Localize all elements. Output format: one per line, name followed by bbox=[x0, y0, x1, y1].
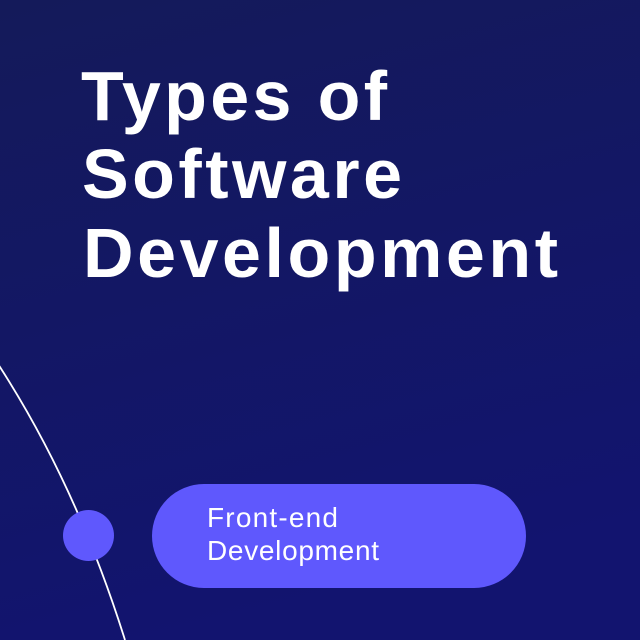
pill label: Front-end bbox=[207, 502, 338, 533]
title: Development bbox=[83, 214, 558, 292]
pill: Front-end Development bbox=[152, 484, 526, 588]
curved timeline line bbox=[0, 364, 125, 640]
title: Software bbox=[82, 135, 402, 213]
timeline marker dot bbox=[63, 510, 114, 561]
pill label bbox=[207, 502, 379, 566]
title: Types of bbox=[81, 57, 388, 135]
pill label: Development bbox=[207, 535, 379, 566]
title bbox=[81, 57, 558, 292]
